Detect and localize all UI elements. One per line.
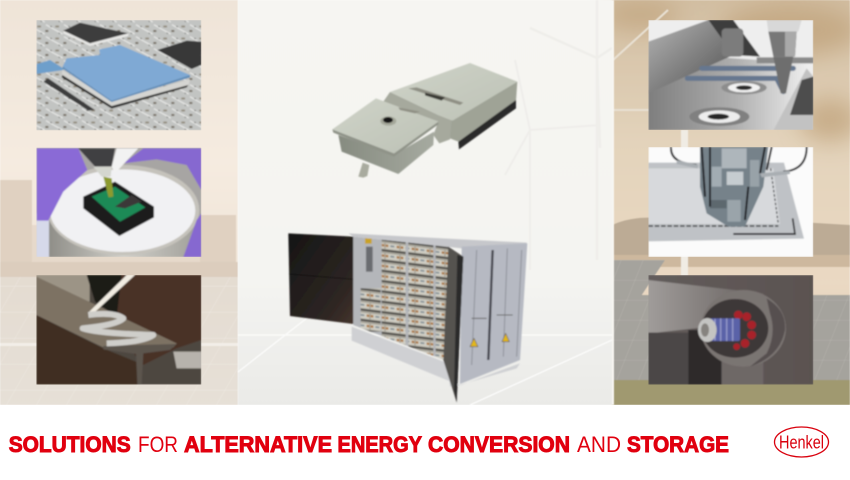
title: FOR: [138, 432, 178, 457]
photo: robotic dispenser over plate: [648, 147, 813, 257]
panel: center pale backdrop with wind turbines: [238, 0, 614, 405]
title: STORAGE: [627, 432, 729, 457]
title: [9, 432, 729, 457]
background: right sky, turbines and solar field: [600, 0, 850, 405]
footer band: [0, 405, 850, 480]
photo: adhesive applied on a metal edge: [36, 275, 201, 385]
logo: Henkel: [774, 427, 828, 457]
title: ENERGY: [338, 432, 422, 457]
background: left cityscape and solar panels: [0, 0, 238, 405]
title: AND: [577, 432, 621, 457]
logo: Henkel: Henkel: [779, 432, 824, 452]
title: SOLUTIONS: [9, 432, 131, 457]
product: battery storage container: [288, 233, 527, 402]
photo: thermal pad on circuit board: [36, 20, 201, 130]
product: inverter enclosure: [332, 63, 517, 178]
title: CONVERSION: [428, 432, 570, 457]
title: ALTERNATIVE: [184, 432, 332, 457]
photo: threadlocker on bolt in bracket: [648, 275, 813, 385]
photo: dispensing bead on metal housing: [648, 20, 813, 130]
photo: potting a module in a gloved hand: [36, 148, 201, 257]
